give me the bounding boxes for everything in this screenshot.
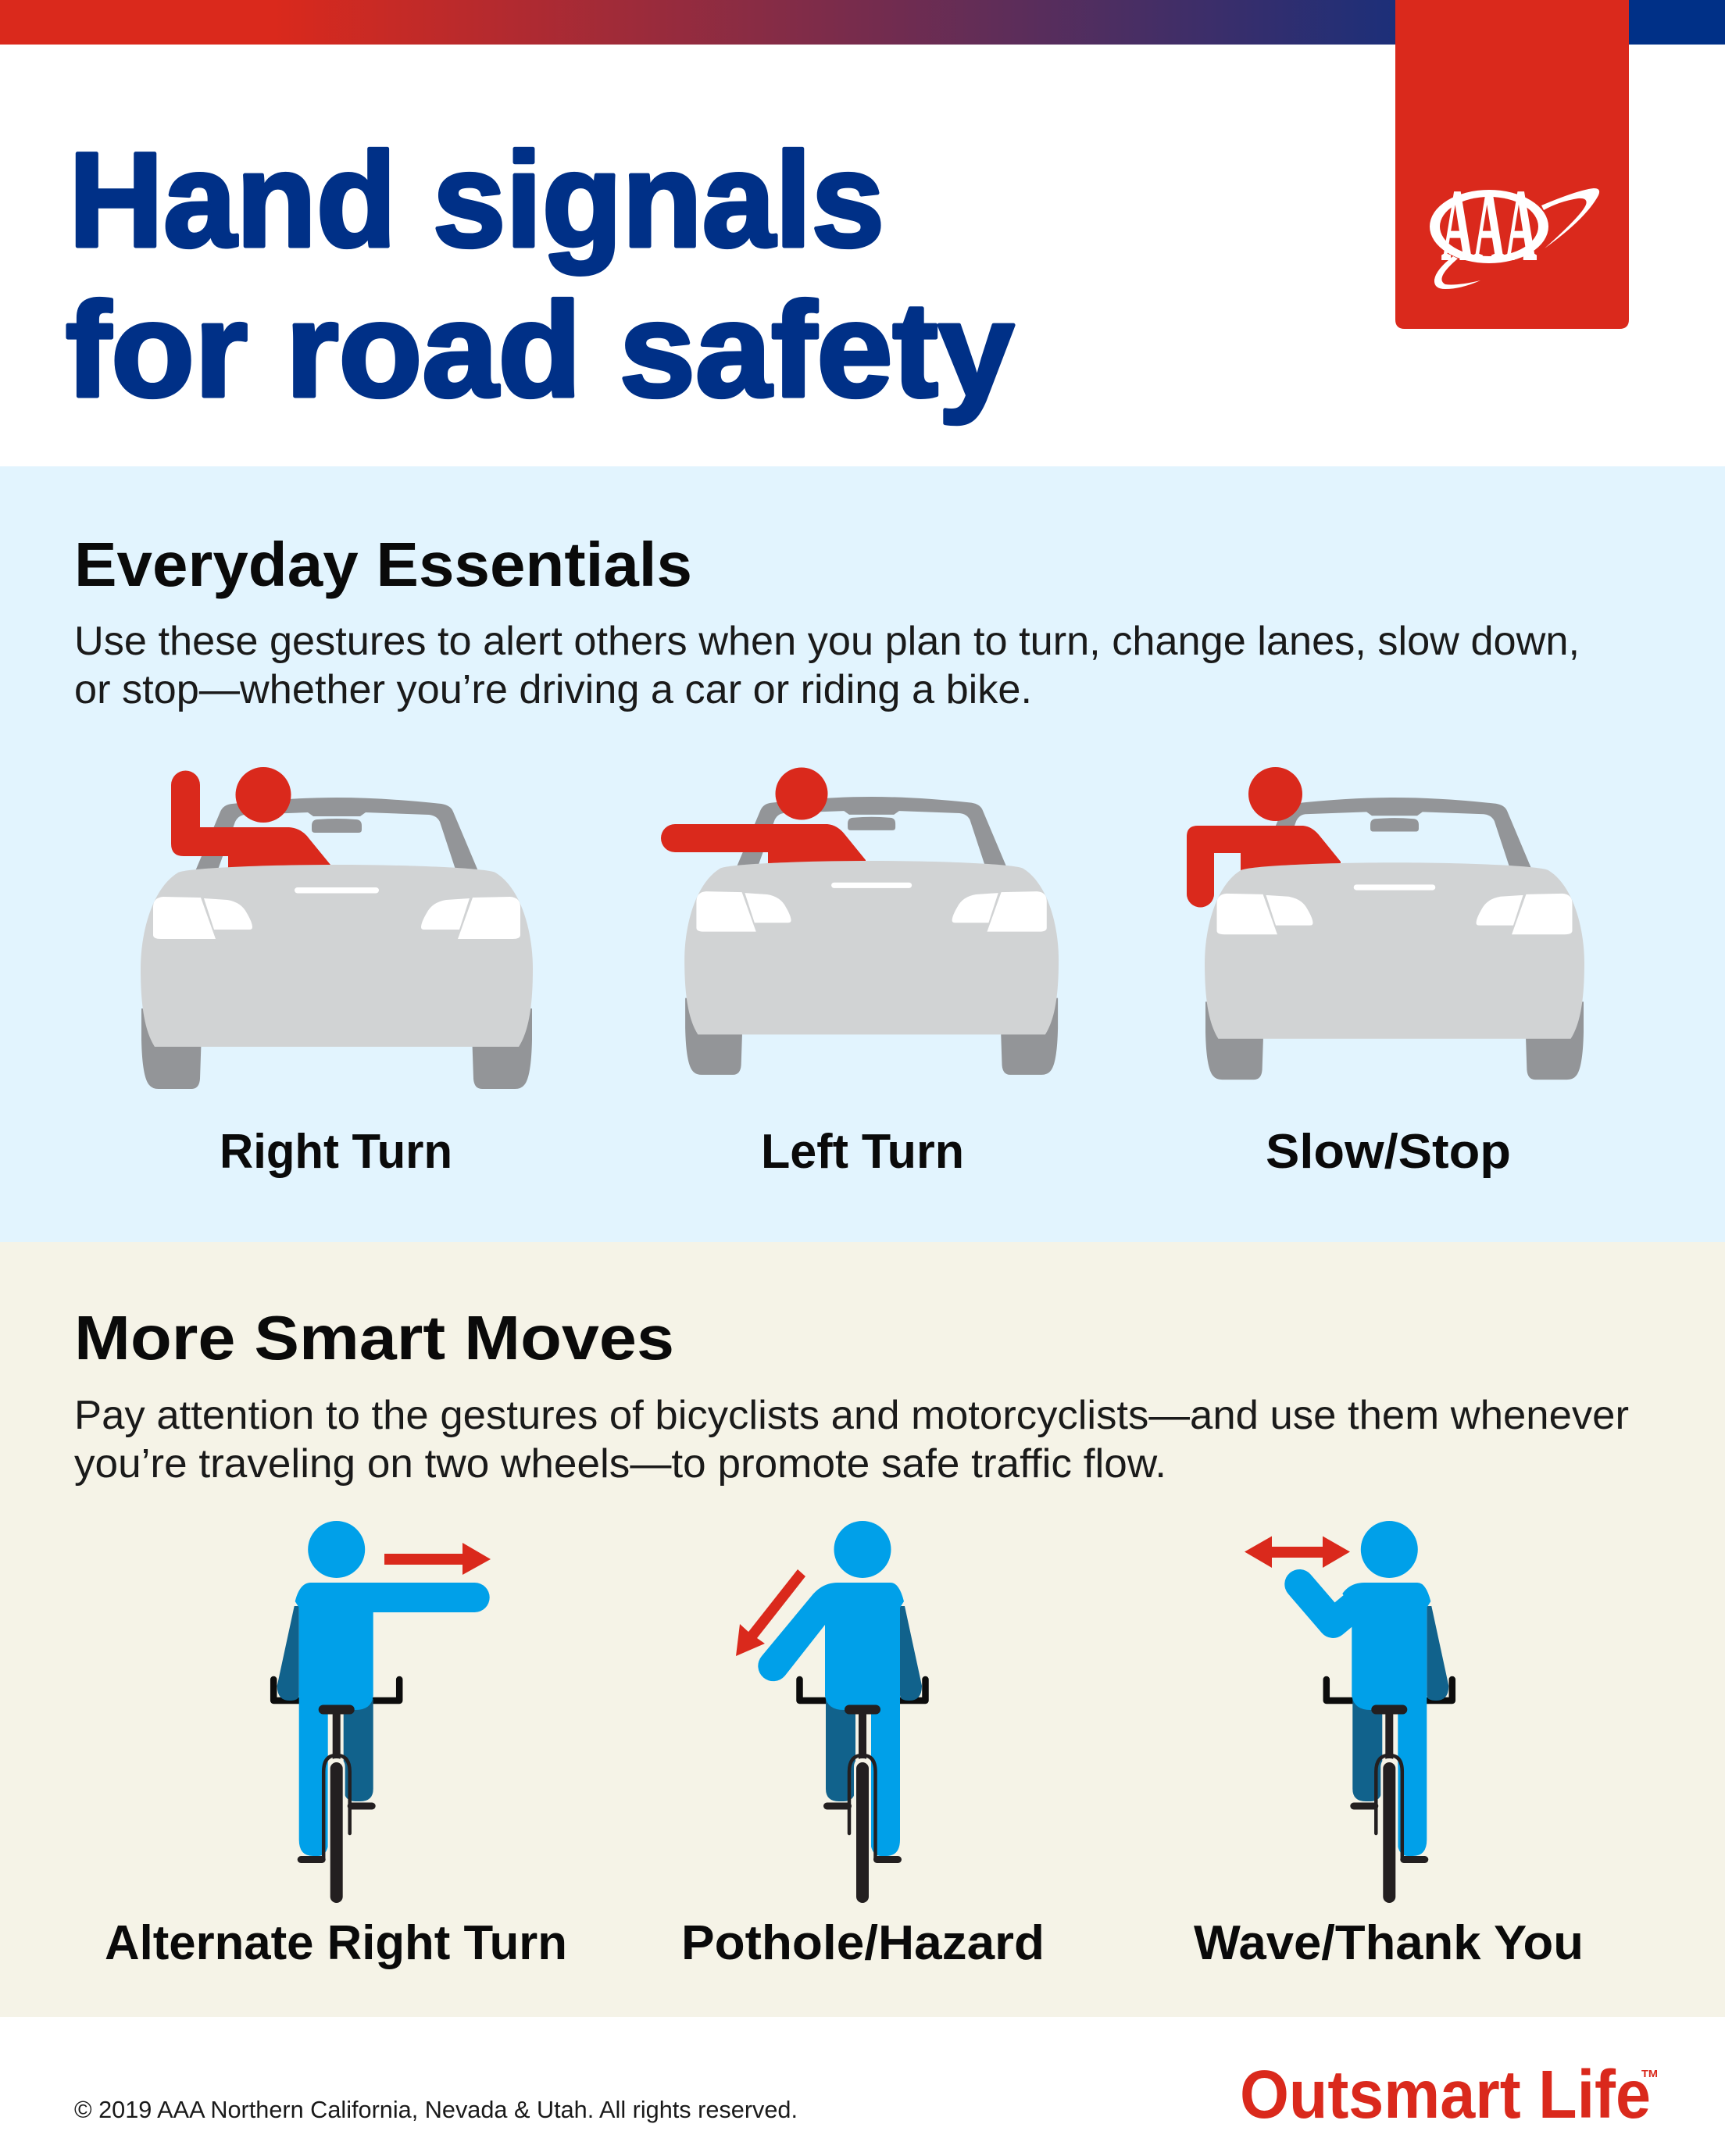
intro text: you’re traveling on two wheels—to promote safe traffic flow. bbox=[74, 1441, 1166, 1487]
title bbox=[66, 125, 1014, 425]
arrow: double-headed horizontal bbox=[1245, 1536, 1350, 1568]
label: pothole/hazard: Pothole/Hazard bbox=[681, 1916, 1045, 1970]
panel: more smart moves bbox=[0, 1242, 1725, 2017]
label: wave/thank you: Wave/Thank You bbox=[1194, 1916, 1584, 1970]
footer copyright: © 2019 AAA Northern California, Nevada & Utah. All rights reserved. bbox=[74, 2096, 798, 2123]
panel: everyday essentials bbox=[0, 466, 1725, 1242]
label: left turn: Left Turn bbox=[761, 1125, 964, 1179]
top gradient bar bbox=[0, 0, 1725, 45]
illustration: car right turn signal bbox=[141, 767, 533, 1089]
arrow: diagonal down-left bbox=[736, 1569, 805, 1656]
label: right turn: Right Turn bbox=[220, 1125, 452, 1179]
intro text: Pay attention to the gestures of bicyclists and motorcyclists—and use them whenever bbox=[74, 1393, 1629, 1438]
intro text bbox=[74, 1393, 1629, 1487]
illustration: car slow or stop signal bbox=[1187, 767, 1584, 1080]
title: Hand signals bbox=[69, 125, 884, 275]
heading: everyday essentials: Everyday Essentials bbox=[74, 530, 692, 599]
illustration: cyclist pothole or hazard bbox=[736, 1521, 925, 1903]
arrow: right bbox=[384, 1543, 491, 1575]
label: slow/stop: Slow/Stop bbox=[1266, 1125, 1511, 1179]
heading: more smart moves: More Smart Moves bbox=[74, 1303, 674, 1372]
icon: AAA oval logo: AAA bbox=[1441, 170, 1537, 282]
logo: outsmart life: Outsmart Life bbox=[1240, 2057, 1651, 2133]
illustration: cyclist wave or thank you bbox=[1245, 1521, 1452, 1903]
title: for road safety bbox=[66, 275, 1014, 425]
AAA logo tab bbox=[1395, 0, 1629, 329]
illustration: cyclist alternate right turn bbox=[273, 1521, 491, 1903]
intro text: or stop—whether you’re driving a car or riding a bike. bbox=[74, 667, 1032, 712]
logo: outsmart life: TM bbox=[1641, 2068, 1658, 2079]
intro text: Use these gestures to alert others when you plan to turn, change lanes, slow down, bbox=[74, 619, 1580, 664]
label: alternate right turn: Alternate Right Turn bbox=[105, 1916, 567, 1970]
icon: AAA oval logo bbox=[1430, 170, 1599, 289]
intro text bbox=[74, 619, 1580, 712]
illustration: car left turn signal bbox=[661, 767, 1059, 1075]
